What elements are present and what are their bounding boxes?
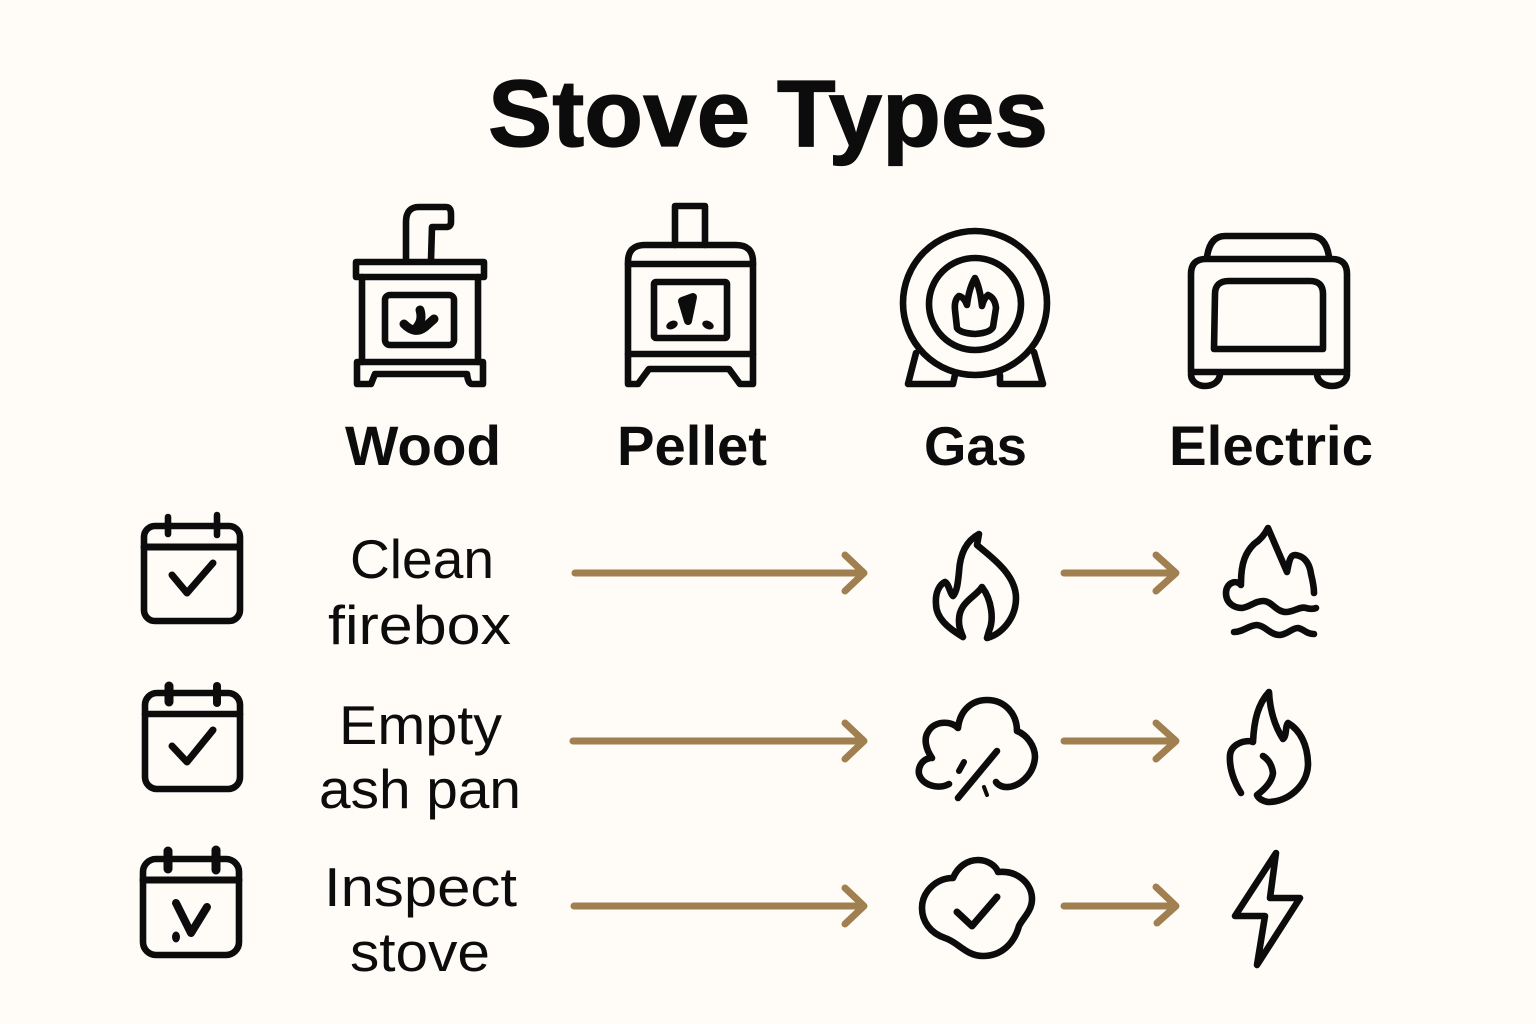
arrow: row 2 short	[1064, 723, 1176, 759]
text: Empty ash pan	[319, 694, 521, 820]
label: Pellet: Pellet	[617, 414, 767, 477]
text: Inspect stove: Inspect	[324, 856, 517, 918]
icon: calendar check row 2	[145, 686, 240, 789]
arrow: row 1 short	[1064, 555, 1176, 591]
text: Inspect stove: stove	[350, 921, 490, 983]
arrow: row 3 long	[574, 888, 864, 924]
text: Clean firebox: firebox	[328, 594, 511, 656]
arrow: row 1 long	[575, 555, 864, 591]
icon: flame	[936, 534, 1016, 638]
icon: pellet stove	[628, 206, 753, 384]
text: Inspect stove	[324, 856, 517, 983]
icon: electric stove	[1191, 236, 1347, 386]
text: Empty ash pan: Empty	[339, 694, 503, 756]
icon: calendar check row 3	[143, 850, 239, 955]
label: Electric: Electric	[1169, 414, 1373, 477]
arrow: row 2 long	[573, 723, 864, 759]
label: Wood: Wood	[345, 414, 501, 477]
icon: lightning bolt	[1235, 853, 1300, 965]
icon: gas stove	[903, 231, 1047, 384]
title: Stove Types	[488, 61, 1048, 167]
arrow: row 3 short	[1064, 887, 1176, 923]
text: Clean firebox	[328, 528, 511, 656]
icon: flame with waves	[1226, 528, 1316, 635]
icon: smoke cloud	[919, 700, 1035, 798]
icon: flame outline	[1230, 692, 1308, 802]
icon: cloud with check	[922, 860, 1032, 956]
icon: wood stove	[356, 207, 484, 384]
text: Clean firebox: Clean	[350, 528, 494, 590]
icon: calendar check row 1	[144, 515, 240, 621]
label: Gas: Gas	[924, 415, 1027, 477]
text: Empty ash pan: ash pan	[319, 758, 521, 820]
